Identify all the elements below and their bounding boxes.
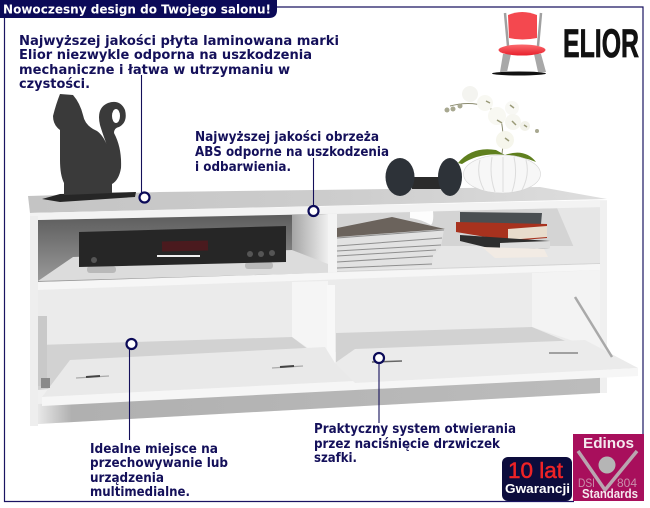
badge: 10 year warranty: 10 lat — [508, 458, 563, 483]
callout: ABS edging: i odbarwienia. — [195, 160, 291, 175]
title banner: Nowoczesny design do Twojego salonu! — [3, 2, 271, 16]
CD player — [79, 226, 286, 273]
callout: ABS edging: Najwyższej jakości obrzeża — [195, 130, 379, 145]
callout: laminated board: Najwyższej jakości płyta laminowana marki — [19, 34, 339, 49]
cat figurine — [42, 94, 136, 202]
callout: laminated board: mechaniczne i łatwa w utrzymaniu w — [19, 63, 290, 78]
books stack — [456, 212, 550, 258]
cabinet top front edge — [30, 200, 607, 220]
callout: ABS edging — [195, 130, 389, 216]
callout: laminated board — [19, 34, 339, 202]
callout: opening system: szafki. — [314, 451, 357, 466]
upper left compartment — [38, 214, 328, 282]
callout: opening system: przez naciśnięcie drzwiczek — [314, 437, 500, 452]
cabinet carcass — [30, 200, 607, 426]
cabinet top surface — [28, 187, 607, 213]
furniture: TV cabinet — [28, 187, 638, 426]
badge: Edinos standards: DSI — [578, 476, 595, 490]
callout: storage — [90, 339, 228, 500]
right door flap — [335, 340, 638, 390]
callout: opening system — [314, 353, 516, 466]
badge: Edinos standards: Standards — [582, 487, 638, 501]
left door flap — [42, 347, 355, 406]
hinges and gas struts — [38, 297, 612, 388]
badge: Edinos standards: Edinos — [583, 435, 634, 452]
callout: opening system: Praktyczny system otwierania — [314, 422, 516, 437]
badge: Edinos standards: 804 — [617, 476, 637, 490]
magazines stack — [337, 217, 445, 270]
callout: storage: przechowywanie lub — [90, 456, 228, 471]
callout: storage: multimedialne. — [90, 485, 190, 500]
callout: storage: urządzenia — [90, 471, 164, 486]
middle shelf edge — [38, 264, 600, 290]
vase with orchid — [444, 86, 540, 193]
vase — [464, 155, 540, 193]
badge: 10 year warranty: Gwarancji — [505, 482, 570, 496]
headphones — [386, 158, 462, 196]
logo: red chair — [492, 12, 546, 76]
upper right compartment — [337, 207, 600, 272]
callout: laminated board: czystości. — [19, 77, 90, 92]
callout: ABS edging: ABS odporne na uszkodzenia — [195, 145, 389, 160]
plinth — [38, 376, 600, 424]
badge: Edinos standards — [573, 434, 644, 501]
badge: 10 year warranty — [502, 457, 572, 501]
orchid leaves — [458, 149, 536, 164]
callout: laminated board: Elior niezwykle odporna na uszkodzenia — [19, 48, 312, 63]
lower compartment — [38, 214, 600, 390]
orchid flowers — [444, 86, 539, 154]
callout: storage: Idealne miejsce na — [90, 442, 218, 457]
